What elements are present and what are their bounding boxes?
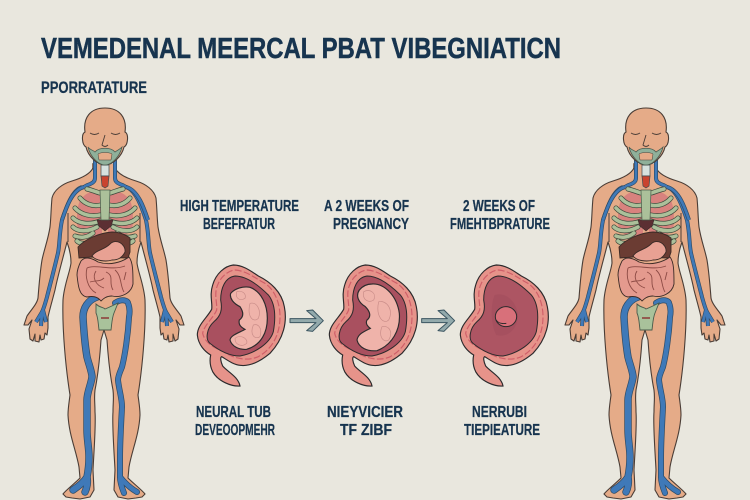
- label: stage 2 top: [324, 198, 410, 233]
- label: stage 1 top: HIGH TEMPERATURE: [180, 198, 299, 215]
- label: stage 3 top: 2 WEEKS OF: [463, 198, 535, 215]
- label: stage 1 bottom: [195, 404, 275, 439]
- left anatomical figure: [24, 108, 184, 499]
- label: stage 1 bottom: NEURAL TUB: [196, 404, 271, 421]
- label: stage 3 top: FMEHTBPRATURE: [450, 216, 550, 233]
- label: stage 2 top: PREGNANCY: [333, 216, 410, 233]
- label: stage 3 bottom: [464, 404, 540, 439]
- subtitle: PPORRATATURE: [41, 78, 147, 97]
- embryo stage 3: [460, 265, 548, 386]
- embryo stage 1: [197, 265, 285, 386]
- label: stage 2 top: A 2 WEEKS OF: [324, 198, 409, 215]
- label: stage 1 bottom: DEVEOOPMEHR: [195, 422, 275, 439]
- label: stage 1 top: BEFEFRATUR: [203, 216, 275, 233]
- label: stage 3 top: [450, 198, 550, 233]
- arrow 2: [422, 310, 455, 331]
- label: stage 3 bottom: NERRUBI: [472, 404, 527, 421]
- embryo stage 2: [329, 265, 417, 386]
- arrow 1: [290, 310, 323, 331]
- label: stage 2 bottom: [327, 404, 403, 439]
- label: stage 1 top: [180, 198, 299, 233]
- label: stage 2 bottom: TF ZIBF: [340, 422, 392, 439]
- title: VEMEDENAL MEERCAL PBAT VIBEGNIATICN: [41, 33, 561, 65]
- label: stage 3 bottom: TIEPIEATURE: [464, 422, 540, 439]
- right anatomical figure: [565, 108, 725, 499]
- label: stage 2 bottom: NIEYVICIER: [327, 404, 403, 421]
